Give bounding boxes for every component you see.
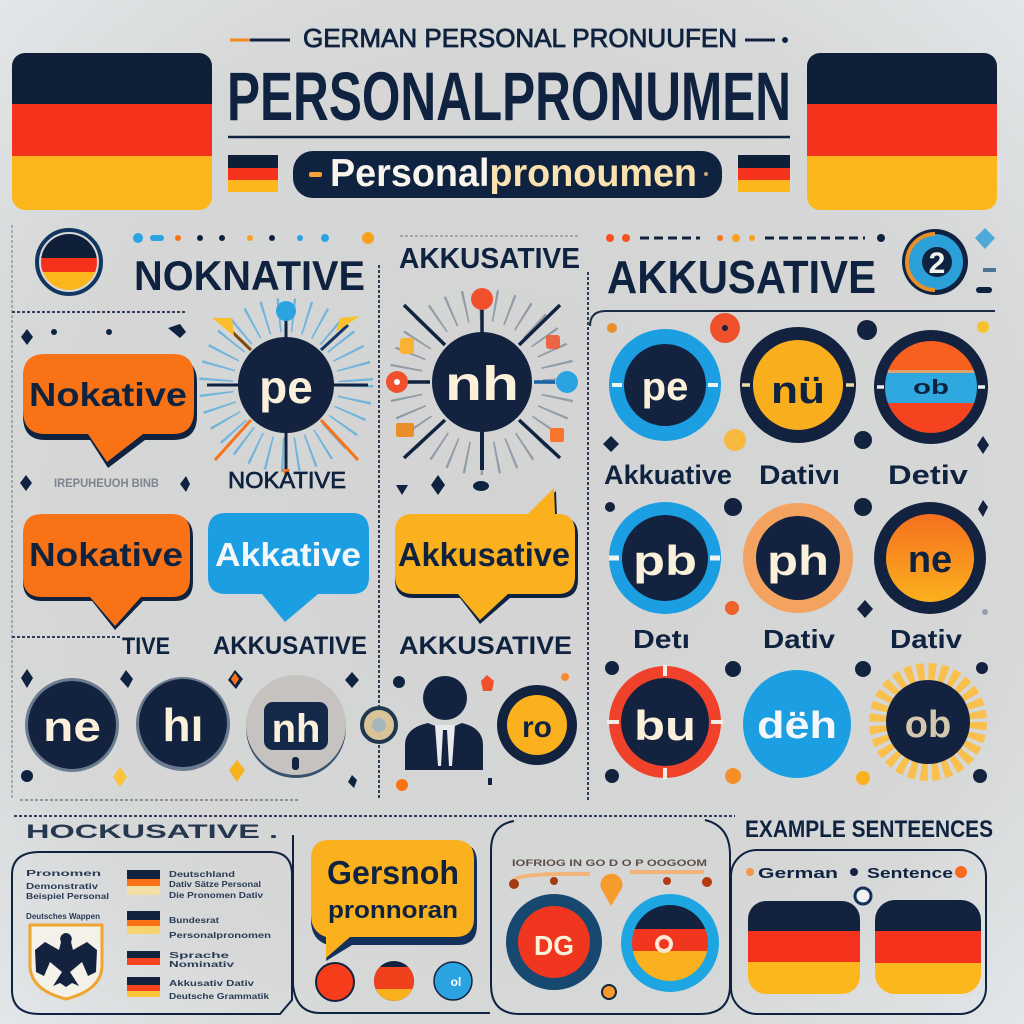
- circle: hi: hı: [163, 699, 203, 751]
- text row: Sentence: [867, 865, 953, 882]
- dot: flag: [374, 961, 414, 1002]
- circle: ro: ro: [522, 711, 552, 744]
- bubble: [311, 840, 477, 961]
- text row: [746, 865, 967, 882]
- text: left column: Pronomen: [26, 869, 101, 878]
- flag rows: [127, 870, 160, 997]
- circle: nu: [740, 327, 856, 443]
- text: right column: Die Pronomen Dativ: [169, 891, 264, 900]
- dot: blue: ol: [451, 975, 461, 989]
- circle: ne: ne: [908, 539, 952, 581]
- text: right column: Bundesrat: [169, 916, 219, 925]
- section header: Nominative: [37, 230, 374, 299]
- text: right column: Dativ Sätze Personal: [169, 880, 261, 889]
- icon: number badge: [902, 229, 968, 295]
- right grid: row 2: [609, 502, 986, 614]
- title rule: [228, 136, 790, 138]
- caption: TIVE: TIVE: [122, 633, 170, 660]
- circle: ne: ne: [43, 703, 101, 750]
- sparkles right: [603, 313, 989, 785]
- row 1 captions: Dativı: [759, 460, 840, 490]
- panel: example sentences: [731, 850, 986, 1014]
- dot: red: [316, 963, 354, 1001]
- circle: pe: [609, 329, 721, 441]
- header: [12, 23, 997, 210]
- caption: Akkusative left: AKKUSATIVE: [213, 632, 367, 660]
- row 2 captions: [633, 624, 963, 654]
- bubble: yellow Akkusative: Akkusative: [398, 536, 570, 573]
- faded text: IOFRIOG IN GO D O P OOGOOM: [512, 858, 707, 868]
- text: left column: Beispiel Personal: [26, 892, 109, 901]
- text: right column: Nominativ: [169, 960, 235, 969]
- bubble: orange Nokative 2: Nokative: [29, 536, 183, 573]
- sparks beside badge: [976, 268, 996, 293]
- caption: Nokative: NOKATIVE: [228, 467, 346, 493]
- bottom panel: table with crest: [12, 852, 292, 1014]
- row 1 captions: [604, 460, 968, 490]
- text: left column: Demonstrativ: [26, 882, 99, 891]
- flag: right large: [807, 53, 997, 210]
- circle: ob sunburst: [879, 673, 977, 771]
- sparkles centre: [396, 475, 489, 495]
- small heading: GERMAN PERSONAL PRONUUFEN: [303, 23, 737, 53]
- caption: Akkusative centre: AKKUSATIVE: [399, 632, 572, 660]
- flag: left large: [12, 53, 212, 210]
- dots row: [606, 234, 885, 242]
- row 2 captions: Dativ: [763, 624, 836, 654]
- bottom panel: Gersnoh bubble: [293, 835, 490, 1013]
- circle: nu: nü: [771, 370, 825, 412]
- icon: marker: [600, 874, 623, 906]
- subtitle pill: Personalpronoumen: [330, 152, 697, 195]
- sparkles: [20, 324, 190, 492]
- sparkles lower row: [21, 669, 569, 791]
- small ring icon: [362, 708, 396, 742]
- bubble: blue Akkative: Akkative: [215, 536, 361, 573]
- circle: ne: [874, 502, 986, 614]
- circle: deh: dëh: [757, 705, 837, 747]
- right grid: row 1: [609, 327, 988, 444]
- title: PERSONALPRONUMEN: [227, 58, 791, 135]
- circle: ph: ph: [767, 537, 829, 584]
- bubble: yellow Akkusative: [395, 488, 578, 624]
- circle: pb: pb: [633, 537, 697, 584]
- flag: small right: [738, 155, 790, 192]
- icon: diamond: [975, 228, 995, 249]
- bubble: orange Nokative: Nokative: [29, 376, 187, 413]
- row 2 captions: Dativ: [890, 624, 963, 654]
- circle: pe: pe: [642, 365, 688, 409]
- caption: faded text: IREPUHEUOH BINB: [54, 476, 159, 490]
- circle: bu: bu: [634, 702, 696, 749]
- circle: ro: [497, 685, 577, 765]
- circle: flag: [621, 894, 719, 992]
- heading: example sentences: EXAMPLE SENTEENCES: [745, 816, 993, 843]
- circle: ph: [743, 503, 853, 613]
- circle: ob sunburst: ob: [905, 704, 951, 746]
- bubble: pronnoran: [328, 897, 458, 924]
- icon: number badge: 2: [929, 247, 945, 280]
- heading: NOKNATIVE: [134, 252, 365, 299]
- sunburst: nh: nh: [445, 358, 519, 411]
- text: right column: Personalpronomen: [169, 931, 271, 940]
- section header: Akkusative right: [606, 228, 996, 303]
- text row: German: [758, 865, 838, 882]
- text: right column: Deutschland: [169, 870, 235, 879]
- circle: hi: [136, 677, 230, 771]
- circle: striped: [874, 330, 988, 444]
- dots row: [133, 232, 374, 244]
- text: right column: Akkusativ Dativ: [169, 979, 255, 988]
- flag right: [875, 900, 981, 994]
- dashed dividers: [12, 225, 735, 816]
- text: right column: Sprache: [169, 951, 230, 960]
- circle: ph: [246, 675, 346, 778]
- row 2 captions: Detı: [633, 624, 690, 654]
- right panel border: [590, 311, 995, 326]
- icon: person: [405, 676, 483, 770]
- icon: flag circle: [37, 230, 101, 294]
- sunburst: pe: pe: [259, 361, 313, 413]
- bubble: Gersnoh: [327, 854, 459, 891]
- bottom panel: circles: [491, 820, 730, 1014]
- circle: DG: DG: [534, 930, 574, 961]
- row 1 captions: Akkuative: [604, 460, 732, 490]
- text: right column: [169, 870, 271, 1001]
- circle: ph: nh: [272, 707, 320, 751]
- icon: small ring: [855, 888, 871, 904]
- heading dashes: [230, 37, 788, 43]
- heading: Akkusative centre: AKKUSATIVE: [399, 243, 580, 275]
- circle: striped: ob: [913, 377, 949, 399]
- sunburst: pe: [207, 301, 368, 478]
- icon: eagle crest: [30, 925, 102, 999]
- circle: DG: [506, 894, 602, 990]
- right grid: row 3: [607, 665, 977, 779]
- bubble: orange Nokative: [23, 354, 197, 468]
- icon: small dot: [602, 985, 616, 999]
- sunburst: nh: [386, 288, 578, 470]
- bubble: blue Akkative: [208, 513, 369, 622]
- bubble: orange Nokative 2: [23, 514, 193, 630]
- flag left: [748, 901, 860, 994]
- text: left column: [26, 869, 109, 921]
- dot: blue: [434, 962, 472, 1000]
- circle: deh: [743, 670, 851, 778]
- orange bar: [509, 872, 712, 889]
- flag: small left: [228, 155, 278, 192]
- circle: pb: [609, 502, 721, 614]
- heading: AKKUSATIVE: [607, 251, 876, 303]
- circle: bu: [607, 665, 723, 779]
- bottom panel: heading: HOCKUSATIVE .: [26, 822, 278, 843]
- text: left column: Deutsches Wappen: [26, 912, 100, 921]
- circle: ne: [25, 678, 119, 772]
- row 1 captions: Detiv: [888, 460, 968, 490]
- text: right column: Deutsche Grammatik: [169, 992, 270, 1001]
